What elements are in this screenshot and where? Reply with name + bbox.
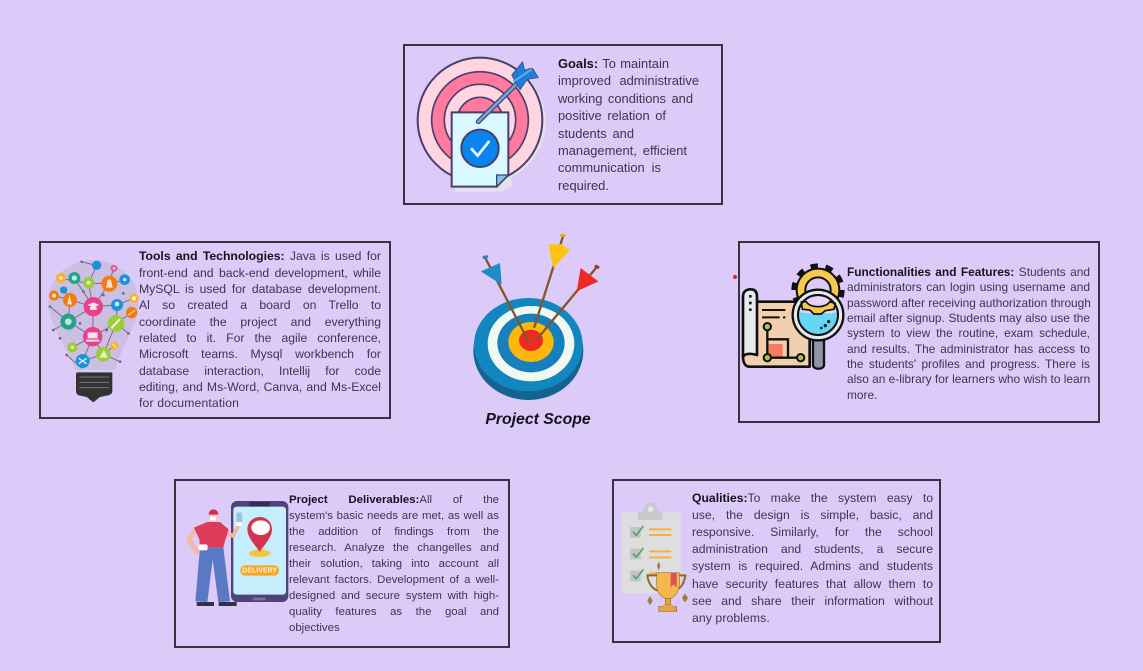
text: qualities description: have security features that allow them to <box>692 577 933 591</box>
icon: checklist with trophy <box>622 502 688 612</box>
text: goals description: communication is <box>558 160 661 175</box>
text: project deliverables description: Project Deliverables:All of the <box>289 494 499 506</box>
icon: delivery person with phone: DELIVERY <box>242 568 277 575</box>
text: tools and technologies description: Microsoft teams. Mysql workbench for <box>139 347 381 361</box>
text: qualities description: responsive. Similarly, for the school <box>692 525 933 539</box>
icon: target with checked document <box>416 56 546 192</box>
text: goals description: Goals: To maintain <box>558 56 669 71</box>
panel: qualities <box>612 479 941 643</box>
text: tools and technologies description: for documentation <box>139 396 239 410</box>
text: functionalities description: system to view the routine, exam schedule, <box>847 326 1090 340</box>
panel: project deliverables <box>174 479 510 648</box>
text: tools and technologies description: Al so created a board on Trello to <box>139 298 381 312</box>
icon: light bulb of technology nodes <box>48 260 139 402</box>
text: tools and technologies description <box>139 249 381 410</box>
text: project deliverables description: quality features as the goal and <box>289 606 499 618</box>
text: qualities description: any problems. <box>692 611 770 625</box>
text: project deliverables description: the addition of findings from the <box>289 526 499 538</box>
text: functionalities description: also an e-library for learners who wish to learn <box>847 372 1090 386</box>
title: project scope: Project Scope <box>485 411 591 428</box>
text: project deliverables description: system's basic needs are met, as well as <box>289 510 499 522</box>
text: qualities description: administration and students, a secure <box>692 542 933 556</box>
icon: center target with three arrows <box>473 234 600 400</box>
text: project deliverables description: research. Analyze the changelles and <box>289 542 499 554</box>
text: tools and technologies description: coordinate the project and everything <box>139 315 381 329</box>
panel: tools and technologies <box>39 241 391 419</box>
text: functionalities description: Functionalities and Features: Students and <box>847 265 1090 279</box>
text: project deliverables description: relevant factors. Development of a well- <box>289 574 499 586</box>
text: project deliverables description: their solution, taking into account all <box>289 558 499 570</box>
panel: functionalities and features <box>738 241 1100 423</box>
icon: delivery person with phone <box>186 501 288 606</box>
text: qualities description <box>692 491 933 625</box>
text: qualities description: use, the design is simple, basic, and <box>692 508 933 522</box>
panel: goals <box>403 44 723 205</box>
text: tools and technologies description: related to it. For the agile conference, <box>139 331 381 345</box>
text: functionalities description: the students' profiles and progress. There is <box>847 357 1090 371</box>
text: functionalities description: and results. The administrator has access to <box>847 342 1090 356</box>
text: functionalities description: more. <box>847 388 877 402</box>
text: tools and technologies description: editing, and Ms-Word, Canva, and Ms-Excel <box>139 380 381 394</box>
text: qualities description: Qualities:To make the system easy to <box>692 491 933 505</box>
text: tools and technologies description: front-end and back-end development, while <box>139 266 381 280</box>
text: goals description <box>558 56 699 193</box>
text: project deliverables description <box>289 494 499 634</box>
text: project deliverables description: objectives <box>289 622 340 634</box>
text: tools and technologies description: MySQL is used for database development. <box>139 282 381 296</box>
text: goals description: management, efficient <box>558 143 687 158</box>
text: goals description: students and <box>558 126 634 141</box>
text: goals description: working conditions and <box>558 91 693 106</box>
text: tools and technologies description: Tools and Technologies: Java is used for <box>139 249 381 263</box>
icon: blueprint with gear and magnifier <box>742 263 845 370</box>
text: qualities description: system is required. Admins and students <box>692 559 933 573</box>
text: functionalities description: email after signup. Students may also use the <box>847 311 1090 325</box>
text: project deliverables description: designed and secure system with high- <box>289 590 499 602</box>
text: functionalities description <box>847 265 1091 402</box>
text: goals description: positive relation of <box>558 108 666 123</box>
text: goals description: improved administrative <box>558 73 699 88</box>
text: qualities description: see and share their information without <box>692 594 933 608</box>
text: tools and technologies description: database interaction, Intellij for code <box>139 364 381 378</box>
text: functionalities description: password after receiving authorization through <box>847 296 1091 310</box>
marker: red dot <box>733 275 737 279</box>
text: functionalities description: administrators can login using username and <box>847 280 1090 294</box>
text: goals description: required. <box>558 178 609 193</box>
